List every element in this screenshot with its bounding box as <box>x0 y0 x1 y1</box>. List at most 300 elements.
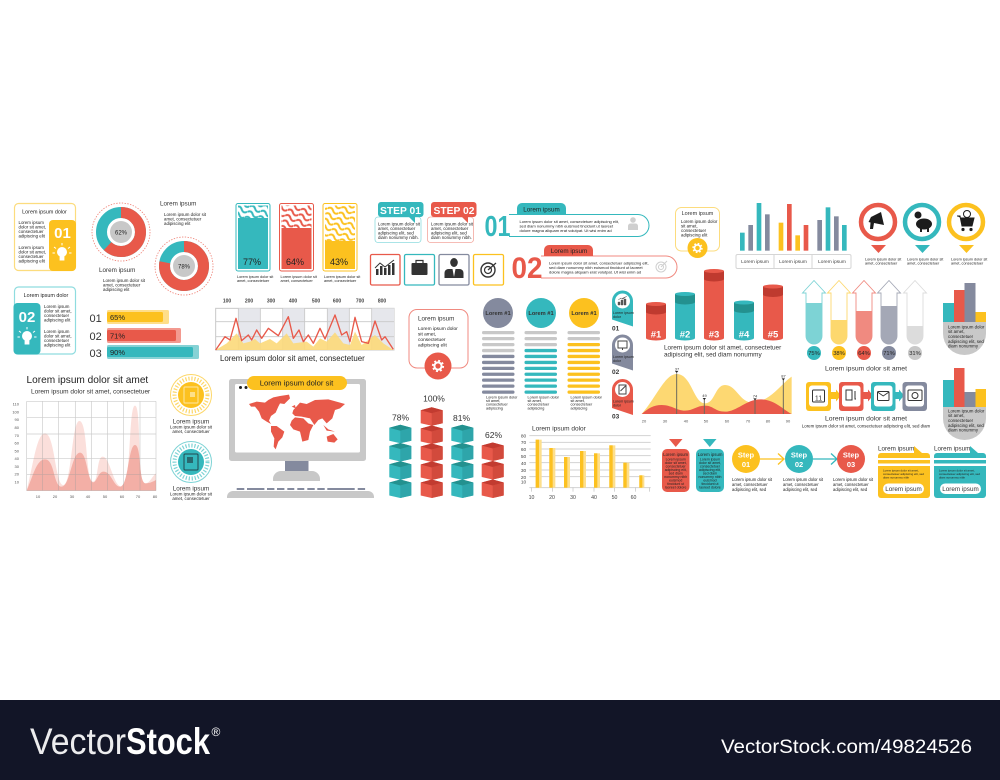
stack 62%: 62% <box>485 430 502 440</box>
teal callout card: Lorem ipsum dolor sit amet, <box>939 468 975 472</box>
stripe column yellow: consectetuer <box>570 403 593 407</box>
body text: dolor sit amet, <box>18 250 46 254</box>
y axis labels: 70 <box>15 433 20 438</box>
body text: Lorem ipsum <box>44 329 70 334</box>
wave bar 43%: 43% <box>330 257 348 267</box>
red note card <box>662 439 690 492</box>
body text: adipiscing elit <box>44 318 71 322</box>
numbered bar 01: 01 <box>484 211 510 243</box>
marker values: 74 <box>753 394 758 398</box>
x axis labels: 10 <box>529 495 534 501</box>
step 01: 01 <box>742 460 750 469</box>
text: teal badge caption: Lorem ipsum dolor sit <box>170 492 213 496</box>
icon: light bulb <box>52 243 72 260</box>
calendar step: 11 <box>815 396 822 402</box>
step 02 callout: adipiscing elit, sed <box>431 230 467 236</box>
mini bar semicircle chart top: diam nonummy <box>948 344 979 348</box>
logo <box>30 721 220 762</box>
x axis labels: 60 <box>120 494 125 499</box>
x axis labels: 40 <box>86 494 91 499</box>
stripe column gray: consectetuer <box>486 403 508 407</box>
x axis labels: 30 <box>663 418 668 424</box>
red note card: sed diam <box>669 472 683 476</box>
bar 03: 90% <box>110 348 125 357</box>
heading: Lorem ipsum dolor <box>22 210 67 216</box>
wave bar captions: Lorem ipsum dolor sit <box>324 275 361 279</box>
panel: red box with gear <box>409 310 468 380</box>
wave bar captions: amet, consectetuer <box>324 279 357 283</box>
cylinder 4: #4 <box>739 330 750 340</box>
cylinder 5: #5 <box>768 330 779 340</box>
text: teal badge caption: amet, consectetuer <box>172 496 210 501</box>
bar 03: 03 <box>90 348 102 360</box>
stripe column teal: Lorem #1 <box>528 311 554 317</box>
y axis labels: 90 <box>15 417 20 422</box>
icon: yellow sun badge <box>170 374 212 416</box>
grouped bar chart: Lorem ipsum <box>818 259 846 265</box>
x axis labels: 20 <box>642 418 647 424</box>
column labels: 500 <box>312 298 320 304</box>
column labels: 700 <box>356 298 364 304</box>
donut caption bottom <box>99 267 146 292</box>
pin: piggy bank: amet, consectetuer <box>907 262 940 266</box>
stripe column gray: Lorem ipsum dolor <box>486 396 518 400</box>
teal callout card: diam nonummy nibh <box>939 476 965 480</box>
pin: megaphone: Lorem ipsum dolor sit <box>865 258 902 262</box>
line chart with alternating columns <box>216 298 394 363</box>
donut chart 62% <box>92 203 150 261</box>
icon process chain: Lorem ipsum dolor sit amet, consectetuer adipiscing elit, sed diam <box>802 424 931 428</box>
column labels: 800 <box>378 298 386 304</box>
bookmark pin 03 <box>612 379 634 420</box>
step 02 callout <box>428 202 476 242</box>
red note card: consectetuer <box>666 464 687 468</box>
panel: yellow gear card <box>676 208 720 258</box>
connector arrows <box>831 390 841 402</box>
step captions: Lorem ipsum dolor sit <box>833 477 874 482</box>
body text: consectetuer <box>418 337 446 343</box>
step 02 callout: diam nonummy nibh. <box>431 235 472 240</box>
yellow number tab <box>49 220 76 271</box>
wave bar captions: Lorem ipsum dolor sit <box>237 275 274 279</box>
grouped bar chart: Lorem ipsum <box>741 259 769 265</box>
body text: sit amet, <box>418 332 436 338</box>
yellow callout card: Lorem ipsum dolor sit amet, <box>883 468 919 472</box>
test tube arrow 75%: 75% <box>808 351 820 357</box>
body text: adipiscing elit <box>18 234 46 238</box>
x axis labels: 50 <box>704 418 709 424</box>
step 02 callout: amet, consectetuer <box>431 226 469 231</box>
arrow 2 <box>813 454 837 464</box>
step captions: adipiscing elit, sed <box>833 487 868 492</box>
step 03: 03 <box>847 460 855 469</box>
bookmark pin 02: 02 <box>612 369 620 376</box>
wave bar captions: Lorem ipsum dolor sit <box>280 275 318 279</box>
teal note card: laoreet dolore <box>699 486 721 490</box>
red note card: laoreet dolore <box>665 486 686 490</box>
text: teal badge caption: Lorem ipsum <box>173 486 209 492</box>
test tube arrow 64%: 64% <box>858 351 870 357</box>
donut caption top <box>160 200 207 226</box>
body text: Lorem ipsum <box>18 220 44 225</box>
bookmark pin 02: Lorem ipsum <box>613 355 634 359</box>
text: yellow badge caption: Lorem ipsum dolor sit <box>170 424 213 430</box>
marker values: 87 <box>781 374 786 378</box>
chart caption: Lorem ipsum dolor sit amet, consectetuer <box>220 354 365 363</box>
numbered bar 01: sed diam nonummy nibh euismod tincidunt ut laoreet <box>520 224 614 228</box>
stripe column yellow: Lorem #1 <box>571 311 597 317</box>
y axis labels: 40 <box>15 456 20 461</box>
step captions: Lorem ipsum dolor sit <box>732 477 773 482</box>
mail step <box>871 382 896 411</box>
panel: lorem box 02 <box>14 287 76 354</box>
stripe column teal <box>524 298 560 410</box>
bookmark pin 02 <box>612 334 634 376</box>
donut chart 62%: 62% <box>115 230 128 236</box>
area chart left <box>12 401 158 499</box>
stripe column gray: Lorem #1 <box>485 311 511 317</box>
logo: Stock <box>126 721 210 762</box>
teal note card: dolor sit amet, <box>699 461 721 465</box>
body text: consectetuer <box>18 254 44 259</box>
test tube arrow 75% <box>802 280 826 360</box>
x axis labels: 70 <box>746 418 751 424</box>
donut caption top: Lorem ipsum dolor sit <box>164 212 207 217</box>
stripe column yellow <box>568 298 603 410</box>
step 02 callout: Lorem ipsum dolor sit <box>431 222 474 226</box>
logo: ® <box>212 725 220 739</box>
donut caption bottom: adipiscing elit <box>103 287 130 292</box>
wave bar captions: amet, consectetuer <box>237 279 270 283</box>
bar 01: 01 <box>90 313 102 325</box>
wave bar 77% <box>236 204 270 271</box>
step captions: Lorem ipsum dolor sit <box>783 477 824 482</box>
teal note card: adipiscing elit, <box>699 468 721 472</box>
legend strip <box>736 254 851 268</box>
icon: gear <box>688 238 708 258</box>
step 01 callout: adipiscing elit, sed <box>378 230 414 236</box>
x axis labels: 60 <box>725 418 730 424</box>
panel: yellow gear card: sit amet, <box>681 224 698 228</box>
stripe column gray: adipiscing <box>486 406 503 410</box>
numbered bar 02: Lorem ipsum <box>551 248 587 255</box>
column labels: 200 <box>245 298 253 304</box>
bar 01: 65% <box>110 313 125 322</box>
bar 03 <box>90 345 199 360</box>
pin: megaphone: amet, consectetuer <box>865 262 898 266</box>
step captions: adipiscing elit, sed <box>783 487 818 492</box>
wave bar 64% <box>280 204 314 271</box>
caption: Lorem ipsum dolor sit amet <box>825 416 907 422</box>
donut chart 78%: 78% <box>178 264 191 270</box>
test tube arrow 38% <box>828 280 850 360</box>
donut caption top: adipiscing elit <box>164 221 191 226</box>
icon: briefcase box <box>404 254 434 285</box>
yellow callout card: Lorem ipsum <box>878 446 914 452</box>
mini bar semicircle chart bottom: consectetuer <box>948 418 974 423</box>
pin: shopping cart: Lorem ipsum dolor sit <box>951 258 988 262</box>
step 02 <box>785 445 813 473</box>
mini bar semicircle chart bottom <box>943 368 986 440</box>
teal callout card: Lorem ipsum <box>942 486 979 493</box>
keyboard <box>227 491 374 498</box>
teal number tab <box>14 303 40 354</box>
icon: teal sun badge <box>170 442 212 482</box>
body text: consectetuer <box>44 313 70 318</box>
panel: yellow gear card: Lorem ipsum dolor <box>681 219 718 224</box>
teal callout card: Lorem ipsum <box>934 446 970 452</box>
y axis labels: 110 <box>13 402 20 406</box>
step 01 <box>732 445 760 473</box>
step 03 <box>837 445 865 473</box>
x axis labels: 20 <box>53 494 58 499</box>
step captions: amet, consectetuer <box>732 482 768 487</box>
stack 78%: 78% <box>392 412 409 422</box>
heading: Lorem ipsum dolor <box>24 293 69 299</box>
red note card: Lorem ipsum <box>663 452 689 457</box>
text: yellow badge caption: amet, consectetuer <box>172 429 210 434</box>
pin: shopping cart: amet, consectetuer <box>951 262 984 266</box>
bar 02: 71% <box>110 332 125 340</box>
body text: consectetuer <box>18 229 44 234</box>
number: 01 <box>54 225 71 242</box>
icon: world map <box>249 395 345 449</box>
text: yellow badge caption <box>170 418 213 434</box>
marker values: 49 <box>702 393 707 398</box>
x axis labels: 30 <box>570 495 576 501</box>
wave bar 43% <box>323 204 357 271</box>
stack 100%: 100% <box>423 394 445 404</box>
step 01 callout: amet, consectetuer <box>378 226 416 231</box>
pin: piggy bank: Lorem ipsum dolor sit <box>907 258 944 262</box>
x axis labels: 40 <box>684 418 689 424</box>
bar 02 <box>90 328 181 343</box>
stripe column teal: sit amet, <box>528 399 542 403</box>
x axis labels: 30 <box>70 494 75 499</box>
pin: shopping cart <box>949 205 988 266</box>
bookmark pin 03: 03 <box>612 414 620 420</box>
stripe column gray: sit amet, <box>486 399 500 403</box>
column labels: 100 <box>223 298 231 304</box>
teal note card: Lorem ipsum <box>700 458 720 462</box>
stripe column yellow: adipiscing <box>570 406 587 410</box>
heading: Lorem ipsum <box>418 316 454 322</box>
red note card: euismod <box>669 478 682 482</box>
bookmark pin 01 <box>612 290 634 332</box>
stripe column yellow: Lorem ipsum dolor <box>570 396 603 400</box>
grouped bar chart: Lorem ipsum <box>779 259 807 265</box>
title: area chart: Lorem ipsum dolor sit amet <box>26 375 148 386</box>
cylinder bar chart <box>646 269 783 358</box>
wave bar 64%: 64% <box>286 257 304 267</box>
stripe column gray <box>482 298 518 410</box>
test tube arrow 71%: 71% <box>883 351 895 357</box>
icon process chain <box>802 382 931 428</box>
cylinder 3: #3 <box>709 330 719 340</box>
x axis labels: 90 <box>786 418 791 424</box>
step captions: amet, consectetuer <box>833 482 869 487</box>
y axis labels: 80 <box>15 425 20 430</box>
teal note card: sed diam <box>703 472 717 476</box>
mini bar semicircle chart top: sit amet, <box>948 329 965 334</box>
step captions: amet, consectetuer <box>783 482 819 487</box>
step 01 callout <box>375 202 424 242</box>
note step <box>839 382 864 411</box>
donut chart 78% <box>155 237 213 295</box>
y axis labels: 70 <box>521 440 526 446</box>
isometric cube stacks <box>389 394 504 498</box>
icon: person <box>628 217 638 230</box>
numbered bar 02: Lorem ipsum dolor sit amet, consectetuer adipiscing elit, <box>549 260 649 266</box>
numbered bar 01: Lorem ipsum <box>523 206 560 214</box>
step 03: Step <box>843 450 860 460</box>
y axis labels: 40 <box>521 461 526 467</box>
bookmark pin 02: dolor <box>613 359 622 363</box>
teal note card: euismod <box>703 478 717 482</box>
body text: dolor sit amet, <box>18 224 46 230</box>
bookmark pin 01: Lorem ipsum <box>613 311 634 315</box>
horizontal progress bars <box>90 310 199 360</box>
body text: dolor sit amet, <box>44 308 72 314</box>
wave bar 77%: 77% <box>243 257 261 267</box>
body text: adipiscing elit <box>418 342 447 348</box>
step 01: Step <box>738 450 755 460</box>
cylinder 2: #2 <box>680 330 690 340</box>
column labels: 300 <box>267 298 275 304</box>
step 02 callout: STEP 02 <box>433 206 475 217</box>
donut caption bottom: Lorem ipsum dolor sit <box>103 278 146 283</box>
mini bar semicircle chart bottom: Lorem ipsum dolor <box>948 408 985 414</box>
icon: light bulb <box>18 327 36 344</box>
bookmark pin 03: dolor <box>613 404 622 408</box>
icon: target box <box>474 254 504 285</box>
text: teal badge caption <box>170 486 213 501</box>
x axis labels: 80 <box>766 418 771 424</box>
stripe column teal: Lorem ipsum dolor <box>528 396 560 400</box>
window dots <box>239 386 242 389</box>
computer monitor with world map: Lorem ipsum dolor sit <box>260 378 334 388</box>
test tube arrow 31%: 31% <box>909 351 921 357</box>
image id: VectorStock.com/49824526 <box>721 736 972 758</box>
y axis labels: 50 <box>521 454 526 460</box>
test tube arrow 64% <box>852 280 876 360</box>
x axis labels: 40 <box>591 495 597 501</box>
y axis labels: 100 <box>12 410 20 414</box>
arrow 1 <box>760 454 784 464</box>
footer band <box>0 700 1000 780</box>
teal callout card <box>933 444 986 498</box>
icon: businessman box <box>439 254 469 285</box>
bookmark pin 03: Lorem ipsum <box>613 400 634 404</box>
y axis labels: 60 <box>15 440 20 446</box>
bar 02: 02 <box>90 331 102 343</box>
body text: Lorem ipsum <box>18 245 44 250</box>
test tube arrow 31% <box>904 280 926 360</box>
stack 81%: 81% <box>453 413 470 423</box>
red note card: adipiscing elit, <box>665 468 687 472</box>
test tube caption: Lorem ipsum dolor sit amet <box>825 366 907 372</box>
cylinder 1: #1 <box>651 330 662 340</box>
step captions: adipiscing elit, sed <box>732 487 767 492</box>
stripe column teal: consectetuer <box>528 403 550 407</box>
numbered bar 01: dolore magna aliquam erat volutpat. Ut wisi enim ad <box>520 228 612 233</box>
teal note card: Lorem ipsum <box>698 452 723 457</box>
title: area chart <box>26 375 151 396</box>
teal note card <box>696 439 724 492</box>
y axis labels: 30 <box>15 464 20 469</box>
donut caption top: Lorem ipsum <box>160 200 196 208</box>
stripe column teal: adipiscing <box>528 406 544 410</box>
marker values: 37 <box>675 366 680 372</box>
x axis labels: 50 <box>103 494 108 499</box>
stripe column yellow: sit amet, <box>570 399 585 403</box>
donut caption bottom: amet, consectetuer <box>103 282 141 288</box>
bookmark pin 01: 01 <box>612 326 620 332</box>
title: area chart: Lorem ipsum dolor sit amet, consectetuer <box>31 388 151 396</box>
step 01 callout: Lorem ipsum dolor sit <box>378 222 421 226</box>
x axis labels: 20 <box>549 495 555 501</box>
text: yellow badge caption: Lorem ipsum <box>173 418 209 426</box>
numbered bar 02: sed diam nonummy nibh euismod tincidunt ut laoreet <box>549 265 643 270</box>
teal note card: tincidunt ut <box>702 482 718 486</box>
pin: megaphone <box>861 205 902 266</box>
numbered bar 01 <box>484 203 649 243</box>
teal note card: nonummy nibh <box>699 475 722 479</box>
donut caption bottom: Lorem ipsum <box>99 267 135 274</box>
body text: Lorem ipsum <box>44 304 70 309</box>
y axis labels: 50 <box>15 448 20 454</box>
y axis labels: 30 <box>521 468 526 474</box>
panel: yellow gear card: consectetuer <box>681 228 707 233</box>
wave bar captions: amet, consectetuer <box>280 279 314 283</box>
y axis labels: 80 <box>521 434 526 440</box>
body text: dolor sit amet, <box>44 334 72 338</box>
mini bar semicircle chart top: consectetuer <box>948 334 974 339</box>
body text: adipiscing elit <box>18 258 46 264</box>
mini bar semicircle chart bottom: adipiscing elit, sed <box>948 423 984 428</box>
caption: adipiscing elit, sed diam nonummy <box>664 352 762 358</box>
icon: chart box <box>370 254 400 285</box>
numbered bar 02: 02 <box>512 252 542 285</box>
test tube arrow 38%: 38% <box>833 351 845 357</box>
y axis labels: 20 <box>521 475 526 481</box>
numbered bar 02 <box>512 245 677 285</box>
mini bar semicircle chart bottom: diam nonummy <box>948 428 979 432</box>
red note card: dolor sit amet, <box>665 461 687 465</box>
mini bar semicircle chart bottom: sit amet, <box>948 413 965 418</box>
column labels: 600 <box>333 298 341 304</box>
camera step <box>902 382 927 411</box>
step 02: Step <box>791 450 808 460</box>
icon: gear <box>424 352 452 380</box>
panel: lorem box 01 <box>14 204 76 271</box>
numbered bar 02: dolore magna aliquam erat volutpat. Ut wisi enim ad <box>549 270 641 274</box>
yellow callout card: consectetuer adipiscing elit, sed <box>883 472 924 476</box>
teal note card: consectetuer <box>700 464 721 468</box>
wave bar captions <box>237 275 361 283</box>
panel: yellow gear card: adipiscing elit <box>681 232 708 238</box>
y axis labels: 60 <box>521 447 526 453</box>
x axis labels: 50 <box>612 495 617 501</box>
step 02: 02 <box>795 460 803 469</box>
x axis labels: 70 <box>136 494 141 499</box>
yellow callout card <box>877 444 930 498</box>
red note card: Lorem ipsum <box>666 458 686 462</box>
bookmark pin 01: dolor <box>613 315 622 319</box>
number: 02 <box>19 309 35 326</box>
yellow callout card: diam nonummy nibh <box>883 476 909 480</box>
yellow callout card: Lorem ipsum <box>885 486 922 493</box>
